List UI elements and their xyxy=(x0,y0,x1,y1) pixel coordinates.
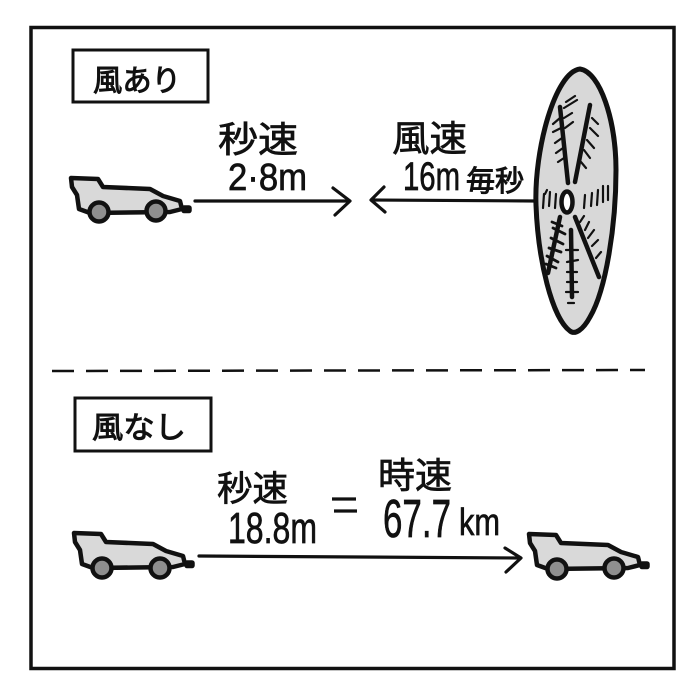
label: without wind xyxy=(75,398,211,451)
text: wind speed xyxy=(392,118,524,199)
text: speed of car per second xyxy=(218,119,307,199)
text: speed of car per second: 秒速 xyxy=(218,119,298,160)
icon: fan xyxy=(536,69,616,332)
label: without wind: 風なし xyxy=(92,412,186,445)
arrow: car direction xyxy=(195,188,350,215)
text: speed per hour: 67.7 xyxy=(383,489,451,549)
equals sign xyxy=(332,499,357,511)
text: speed per second xyxy=(217,470,317,553)
label: with wind xyxy=(73,50,208,102)
text: wind speed: 毎秒 xyxy=(466,165,524,198)
arrow: distance travelled xyxy=(199,548,521,572)
text: speed per hour xyxy=(378,455,500,549)
text: speed of car per second: 2·8m xyxy=(228,157,307,199)
text: speed per second: 秒速 xyxy=(217,470,288,509)
icon: race car, with wind xyxy=(71,178,191,222)
panel: with wind xyxy=(71,50,616,332)
icon: race car, start xyxy=(74,533,194,578)
text: wind speed: 風速 xyxy=(392,118,467,159)
panel: without wind xyxy=(74,398,649,578)
text: wind speed: 16m xyxy=(403,155,460,199)
divider xyxy=(52,370,645,371)
text: speed per second: 18.8m xyxy=(228,504,317,553)
icon: race car, end xyxy=(529,534,649,578)
text: speed per hour: km xyxy=(459,502,500,544)
label: with wind: 風あり xyxy=(93,65,181,98)
arrow: wind direction xyxy=(371,187,536,212)
text: speed per hour: 時速 xyxy=(378,455,452,496)
